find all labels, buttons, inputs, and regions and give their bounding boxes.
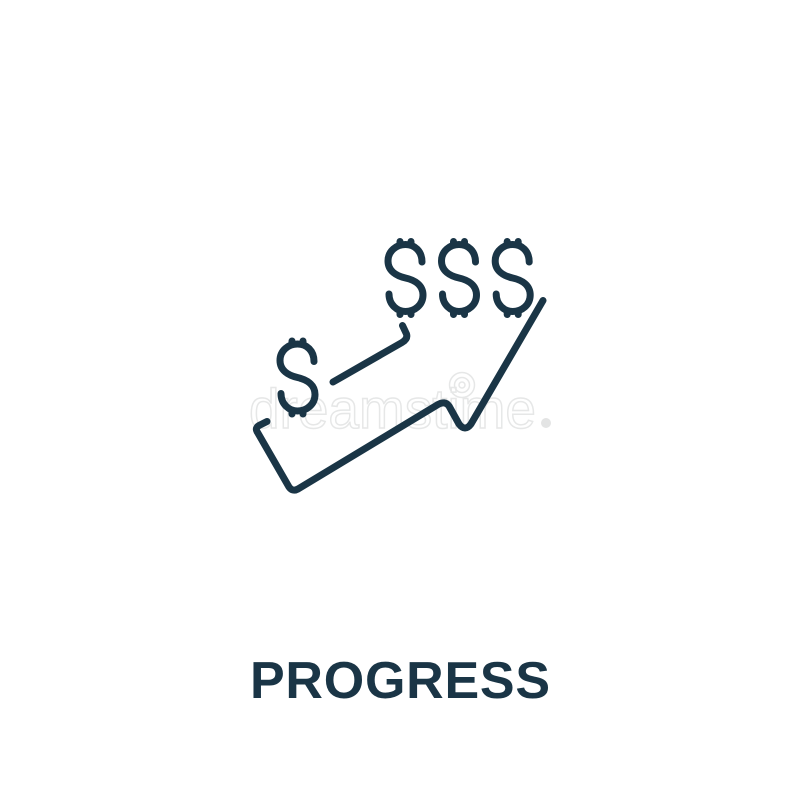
icon: small dollar sign: [280, 341, 315, 414]
watermark text: dreamstime: [249, 377, 536, 440]
title: PROGRESS: [250, 652, 550, 710]
icon: dollar sign two: [442, 242, 476, 314]
icon: dollar sign one: [388, 242, 423, 314]
icon: dollar sign three: [495, 242, 530, 314]
icon: upper arrow segment: [333, 326, 407, 382]
watermark spiral logo: [450, 372, 474, 398]
watermark dot: [541, 418, 551, 428]
watermark: [249, 372, 551, 440]
icon: progress arrow line: [256, 300, 543, 490]
